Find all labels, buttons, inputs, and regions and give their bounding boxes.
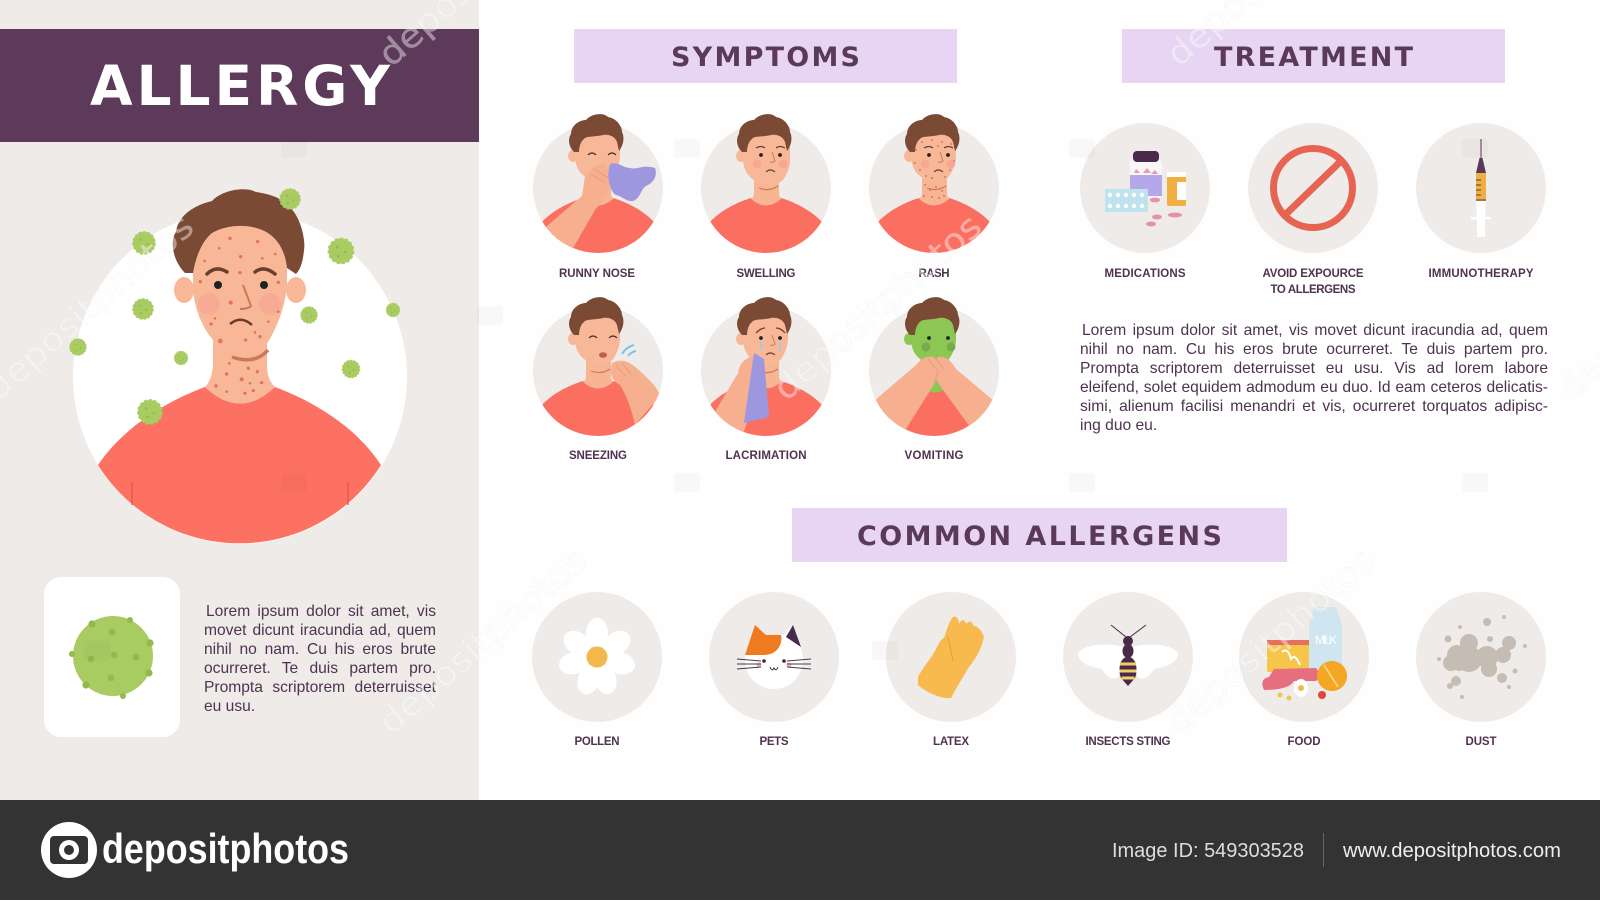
treatment: medications: MEDICATIONS — [1104, 268, 1186, 280]
symptom: sneezing — [533, 297, 663, 462]
text block: treatment description: Lorem ipsum dolor sit amet, vis movet dicunt iracundia ad, quem — [1082, 322, 1548, 339]
symptom: swelling: SWELLING — [736, 268, 796, 280]
allergen: food: MILK — [1315, 633, 1337, 647]
text block: sidebar description: nihil no nam. Cu his eros brute — [204, 641, 436, 658]
text block: sidebar description: ocurreret. Te duis partem pro. — [204, 660, 436, 677]
footer logo icon — [41, 822, 97, 878]
allergen: insect sting: INSECTS STING — [1086, 736, 1171, 748]
treatment: avoid exposure: TO ALLERGENS — [1270, 284, 1356, 296]
symptom: runny nose — [533, 114, 663, 280]
text block: treatment description: eleifend, solet equidem admodum eu duo. Id eam ceteros delicatis- — [1080, 379, 1548, 396]
allergen: food: FOOD — [1288, 736, 1320, 748]
allergen: food — [1239, 592, 1369, 748]
heading: treatment — [1122, 29, 1505, 83]
treatment: immunotherapy — [1416, 123, 1546, 280]
symptom: rash: RASH — [918, 268, 950, 280]
allergen: latex glove: LATEX — [933, 736, 969, 748]
heading: symptoms: SYMPTOMS — [671, 42, 860, 73]
symptom: vomiting: VOMITING — [904, 450, 964, 462]
text block: sidebar description: Prompta scriptorem deterruisset — [204, 679, 436, 696]
text block: treatment description — [1080, 322, 1548, 434]
symptom: lacrimation: LACRIMATION — [726, 450, 806, 462]
text block: sidebar description: Lorem ipsum dolor sit amet, vis — [206, 603, 436, 620]
allergen: dust — [1416, 592, 1546, 748]
symptom: sneezing: SNEEZING — [569, 450, 627, 462]
heading: treatment: TREATMENT — [1214, 42, 1414, 73]
panel: left sidebar — [0, 0, 479, 800]
symptom: runny nose: RUNNY NOSE — [559, 268, 635, 280]
footer bar — [0, 800, 1600, 900]
symptom: swelling — [701, 114, 831, 280]
allergen: pets: PETS — [760, 736, 789, 748]
watermark overlay: depositphotos — [371, 541, 595, 743]
text block: sidebar description: eu usu. — [204, 698, 255, 715]
symptom: lacrimation — [701, 297, 831, 462]
treatment: avoid exposure — [1248, 123, 1378, 296]
heading: common allergens: COMMON ALLERGENS — [857, 521, 1222, 552]
icon card: pollen — [44, 577, 180, 737]
treatment: avoid exposure: AVOID EXPOURCE — [1262, 268, 1364, 280]
heading: common allergens — [792, 508, 1287, 562]
text block: treatment description: Prompta scriptorem deterruisset eu usu. Vis ad lorem labore — [1080, 360, 1548, 377]
heading: symptoms — [574, 29, 957, 83]
symptom: vomiting — [869, 297, 999, 462]
image id: Image ID: 549303528 — [1112, 840, 1304, 862]
text block: treatment description: ing duo eu. — [1080, 417, 1157, 434]
text block: treatment description: simi, alienum facilisi menandri et vis, ocurreret torquatos adipisc- — [1080, 398, 1548, 415]
treatment: medications — [1080, 123, 1210, 280]
footer logo wordmark: depositphotos — [102, 825, 349, 872]
allergen: pollen: POLLEN — [574, 736, 620, 748]
watermark cameras — [84, 139, 1488, 660]
allergen: pets — [709, 592, 839, 748]
title: ALLERGY — [90, 54, 391, 118]
watermark overlay: depositphotos — [766, 207, 990, 409]
allergen: dust: DUST — [1466, 736, 1496, 748]
illustration: allergic man with pollen — [70, 189, 407, 544]
website url: www.depositphotos.com — [1342, 840, 1561, 862]
text block: treatment description: nihil no nam. Cu his eros brute ocurreret. Te duis partem pro. — [1080, 341, 1548, 358]
allergen: pollen — [532, 592, 662, 748]
allergen: latex glove — [886, 592, 1016, 748]
text block: sidebar description: movet dicunt iracundia ad, quem — [204, 622, 436, 639]
treatment: immunotherapy: IMMUNOTHERAPY — [1428, 268, 1534, 280]
watermark overlay: depositphotos — [1159, 541, 1383, 743]
title banner — [0, 29, 479, 142]
symptom: rash — [869, 114, 999, 280]
text block: sidebar description — [204, 603, 436, 715]
allergen: insect sting — [1063, 592, 1193, 748]
